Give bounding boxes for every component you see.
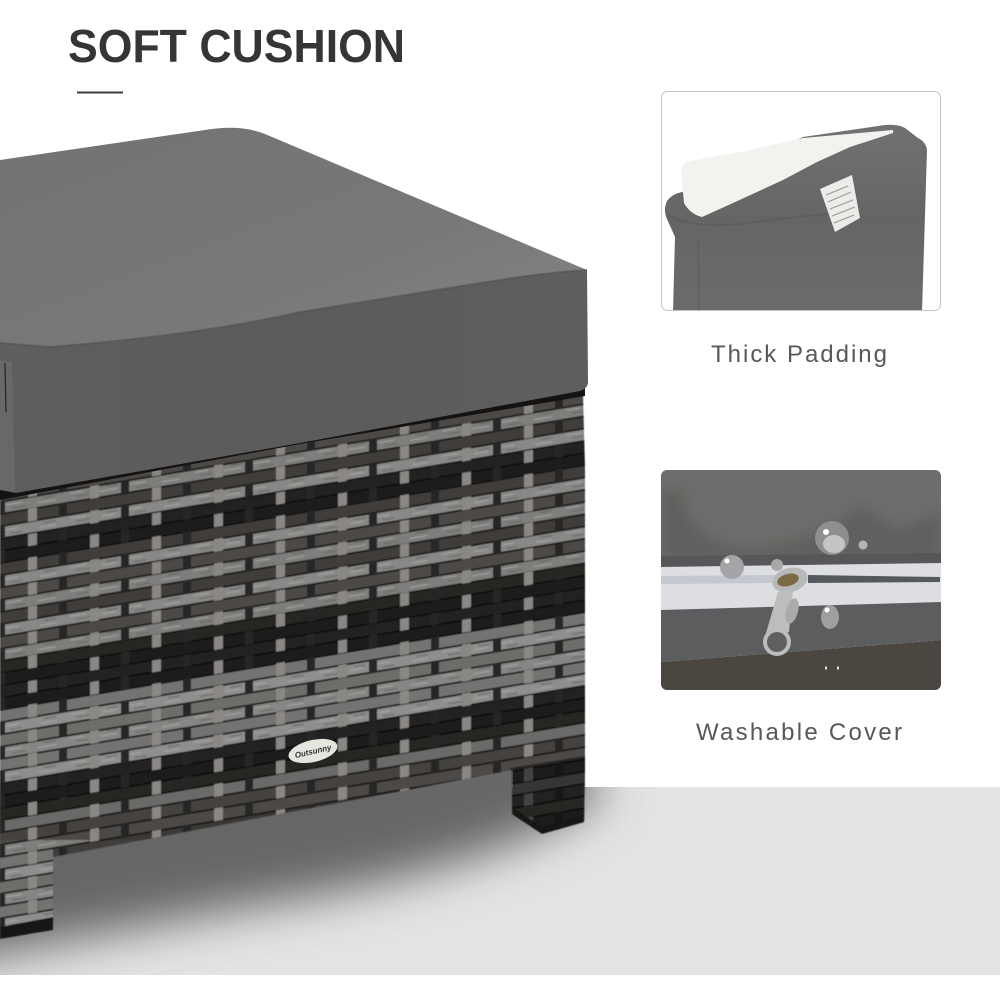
cushion: [0, 128, 588, 500]
label: thick padding: Thick Padding: [711, 341, 887, 368]
dark weave bands: [0, 439, 600, 821]
title: SOFT CUSHION: [68, 20, 405, 72]
zipper tape: [661, 563, 941, 610]
bottom fabric: [661, 640, 941, 690]
title underline: [77, 92, 123, 94]
panel: thick padding: [662, 92, 940, 312]
label: washable cover: Washable Cover: [696, 719, 902, 746]
brand badge: Outsunny: [294, 743, 333, 760]
brand badge: [286, 735, 340, 767]
zipper pull: [763, 564, 810, 656]
water droplets: [720, 521, 868, 668]
upper fabric: [661, 470, 941, 556]
rim shadow: [0, 375, 585, 500]
light weave band: [0, 612, 586, 771]
padding cover: [665, 125, 927, 312]
care label: [820, 175, 860, 232]
lower brown weave: [0, 720, 600, 840]
ottoman: [0, 128, 600, 945]
panel: washable cover: [661, 470, 941, 690]
right leg: [510, 756, 585, 835]
floor with cast shadow: [0, 760, 1000, 975]
lower fabric: [661, 598, 941, 662]
left leg: [0, 848, 54, 918]
cushion front face: [0, 270, 588, 493]
wicker base: [0, 390, 600, 945]
cushion top face: [0, 128, 587, 356]
foam insert: [681, 130, 893, 217]
